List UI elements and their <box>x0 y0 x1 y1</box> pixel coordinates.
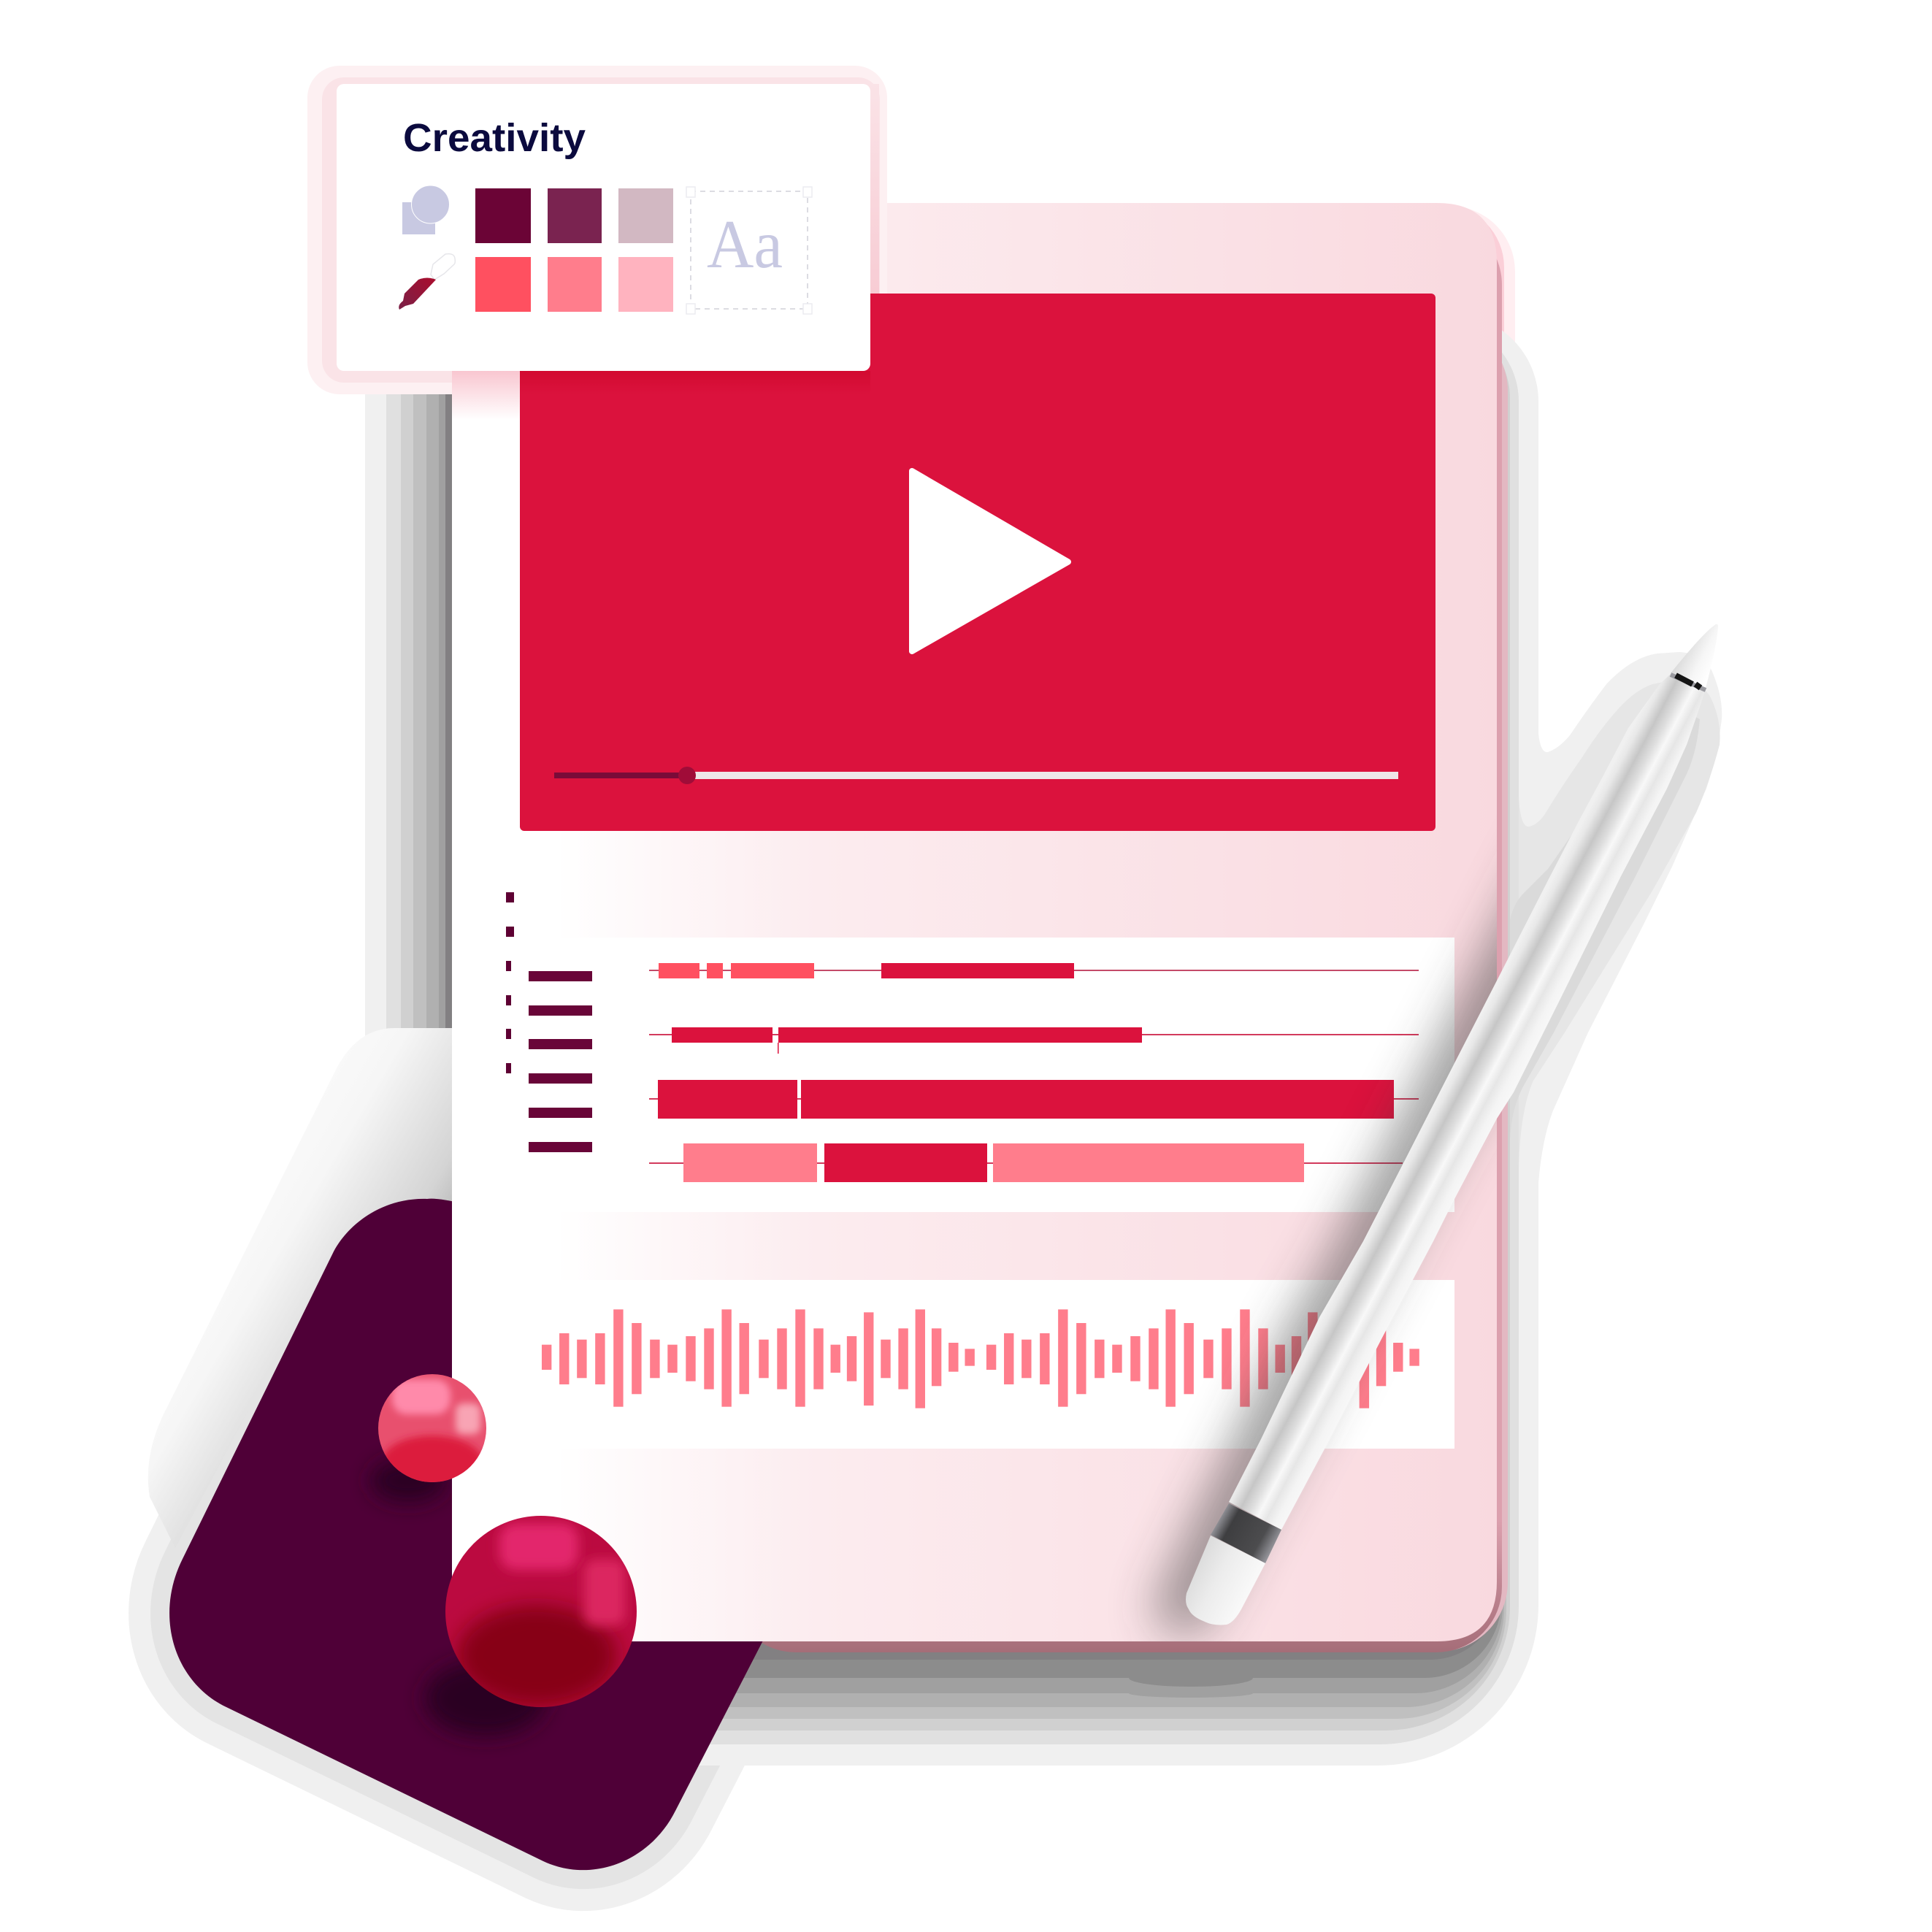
glow behind purple shape <box>148 1028 467 1548</box>
track labels <box>529 971 592 1152</box>
tick column <box>506 892 514 1073</box>
large sphere side highlight <box>584 1560 625 1625</box>
tablet rim <box>730 219 1508 1652</box>
waveform background <box>511 1280 1454 1449</box>
track line 2 <box>649 1027 1419 1054</box>
pencil body <box>1229 674 1706 1530</box>
small sphere lower <box>383 1431 482 1482</box>
tablet top-right pink glow <box>1241 204 1515 425</box>
panel: timeline <box>511 938 1454 1212</box>
purple shape stepped contour <box>169 1199 803 1870</box>
large sphere dark core <box>456 1605 617 1707</box>
track line 1 <box>649 963 1419 978</box>
track line 3 <box>649 1080 1419 1119</box>
large sphere base <box>445 1516 637 1707</box>
video screen <box>520 294 1435 831</box>
pencil cap <box>1186 1536 1265 1625</box>
icon: color dropper <box>399 254 455 310</box>
pencil band <box>1211 1503 1281 1563</box>
large sphere highlight <box>499 1523 578 1570</box>
icon: play button <box>912 471 1068 651</box>
tablet stepped drop shadow <box>365 314 1538 1766</box>
card glow <box>307 66 887 420</box>
card body <box>337 84 870 371</box>
large sphere <box>445 1516 637 1707</box>
typography sample: Aa <box>707 207 783 283</box>
timeline background <box>511 938 1454 1212</box>
progress track <box>687 772 1398 779</box>
tablet <box>452 203 1497 1641</box>
small sphere base <box>378 1374 486 1482</box>
progress played <box>554 773 687 778</box>
video player <box>520 294 1435 831</box>
typography sample <box>686 187 812 314</box>
track line 4 <box>649 1143 1403 1182</box>
panel: audio waveform <box>511 1280 1454 1449</box>
small sphere side highlight <box>456 1403 480 1434</box>
apple pencil <box>1186 624 1718 1625</box>
progress knob <box>678 767 696 784</box>
icon: shapes <box>402 185 450 234</box>
small sphere <box>378 1374 486 1491</box>
pen shadow on tablet <box>1130 863 1497 1641</box>
shade under card <box>520 371 870 394</box>
shadows of spheres <box>370 1459 547 1736</box>
pencil tip ring <box>1671 675 1706 690</box>
pencil tip <box>1671 624 1718 688</box>
small sphere highlight <box>392 1379 451 1414</box>
purple rounded shape <box>169 1199 803 1870</box>
color swatches <box>475 188 673 312</box>
heading: Creativity <box>403 116 586 160</box>
panel: creativity card <box>337 84 870 371</box>
pen stepped contour shadow <box>1510 652 1722 1183</box>
waveform bars <box>542 1309 1419 1408</box>
